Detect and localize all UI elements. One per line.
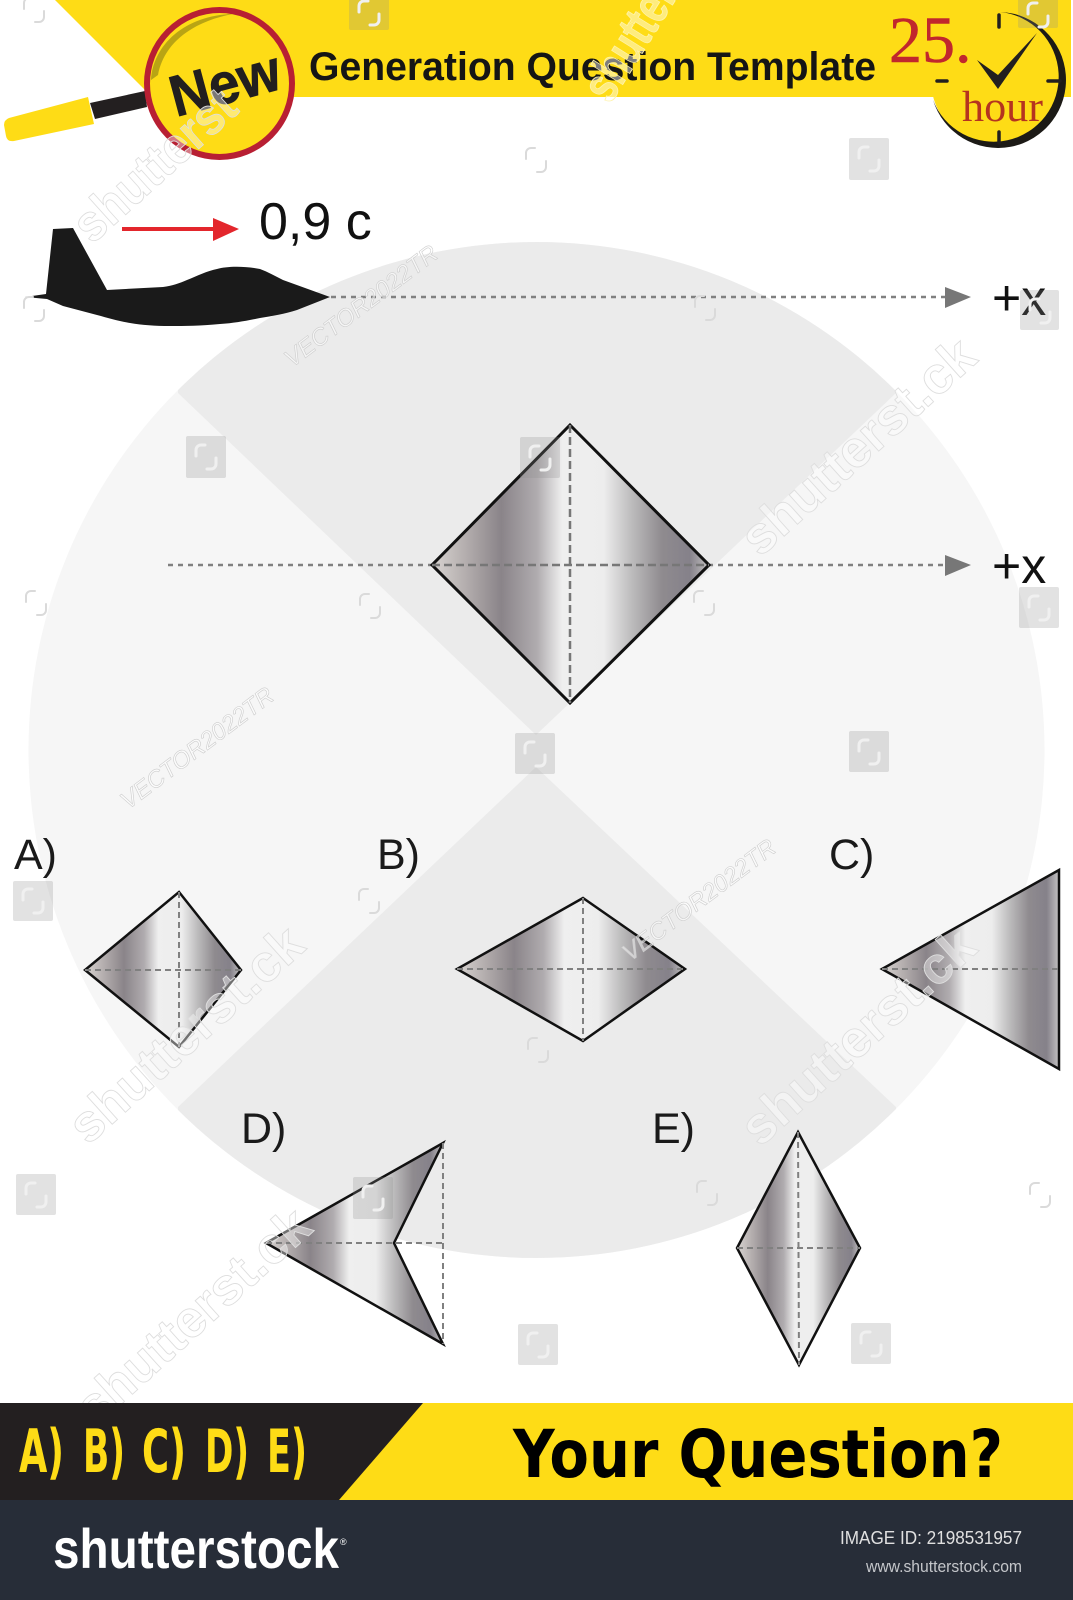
- watermark text: VECTOR2022TR: [617, 834, 781, 967]
- hour label: hour: [962, 84, 1043, 131]
- clock badge: [889, 4, 1066, 148]
- footer logo: shutterstock: [53, 1517, 340, 1580]
- shape C: [882, 870, 1059, 1069]
- option E: [652, 1105, 860, 1365]
- image id: IMAGE ID: 2198531957: [840, 1528, 1022, 1548]
- label B: B): [377, 831, 420, 879]
- watermark text: VECTOR2022TR: [279, 240, 443, 373]
- background disc with wedges: [28, 200, 1044, 1300]
- shape B: [457, 898, 685, 1041]
- label: top +x: +x: [992, 270, 1046, 326]
- label: middle +x: +x: [992, 538, 1046, 594]
- option A: [14, 831, 241, 1047]
- answer options text: B): [83, 1417, 125, 1487]
- answer options text: E): [267, 1417, 307, 1487]
- option D: [241, 1105, 443, 1344]
- footer bar: [0, 1500, 1073, 1600]
- watermark text: shutterst.ck: [64, 1196, 322, 1437]
- speed label: 0,9 c: [259, 193, 372, 251]
- option C: [829, 831, 1059, 1069]
- watermark text: shutterst.ck: [729, 916, 987, 1157]
- answer options text: A): [19, 1417, 64, 1487]
- answer options text: C): [142, 1417, 186, 1487]
- shape E: [737, 1132, 860, 1365]
- icon: jet silhouette: [25, 228, 330, 326]
- label D: D): [241, 1105, 286, 1153]
- website: www.shutterstock.com: [865, 1557, 1022, 1576]
- question text: Your Question?: [512, 1416, 1003, 1493]
- icon: magnifying glass with New: [4, 10, 292, 157]
- watermark text: [57, 0, 987, 1437]
- registered mark: ®: [340, 1537, 347, 1547]
- option B: [377, 831, 685, 1041]
- watermark text: shutterst: [61, 77, 249, 254]
- icon: magnifying glass with New: New: [163, 38, 288, 130]
- arrow: top x axis: [331, 287, 971, 308]
- watermark text: VECTOR2022TR: [115, 682, 279, 815]
- answer options text: D): [205, 1417, 249, 1487]
- header title: Generation Question Template: [309, 45, 876, 89]
- icon: check mark: [977, 33, 1037, 89]
- arrow: middle x axis: [168, 555, 971, 576]
- watermark text: shutterst.ck: [57, 914, 315, 1155]
- answer band: [0, 1403, 1073, 1500]
- label C: C): [829, 831, 874, 879]
- main diamond: [432, 425, 709, 703]
- shape A: [85, 892, 241, 1047]
- arrow: velocity: [122, 218, 239, 241]
- shape D: [266, 1143, 443, 1344]
- number 25: 25.: [889, 4, 972, 77]
- header banner: [55, 0, 1071, 97]
- label E: E): [652, 1105, 695, 1153]
- watermark text: shutterst.ck: [729, 326, 987, 567]
- label A: A): [14, 831, 57, 879]
- answer options text: [19, 1417, 307, 1487]
